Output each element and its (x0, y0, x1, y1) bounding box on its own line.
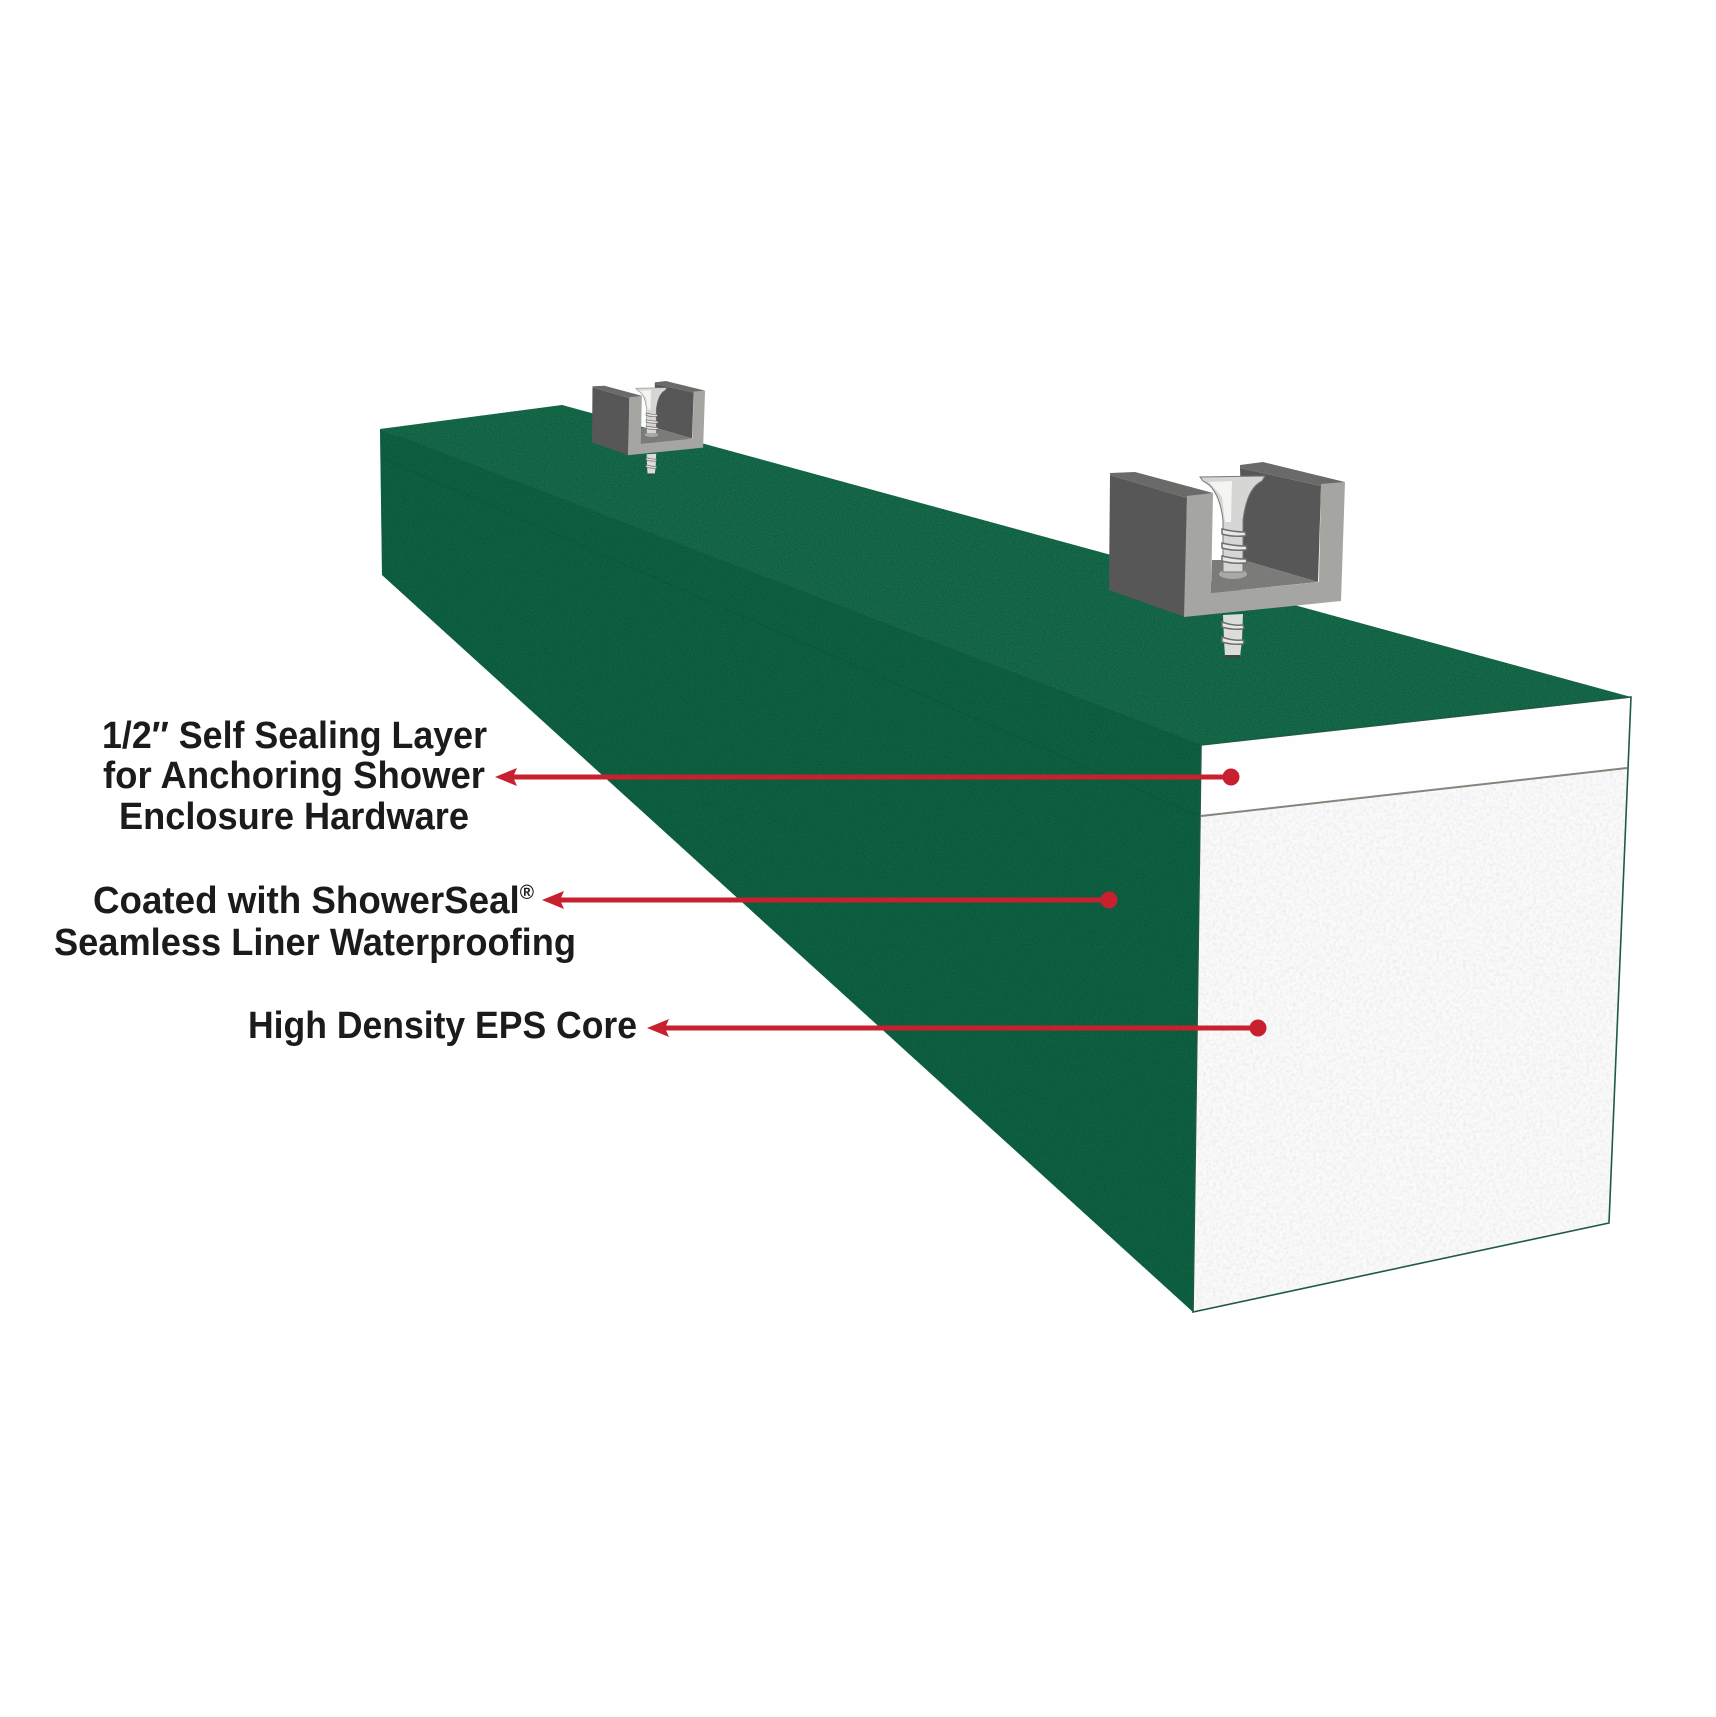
left face (380, 429, 1201, 1312)
label text (54, 880, 576, 964)
callout: EPS core (248, 1005, 1266, 1047)
label text: Coated with ShowerSeal (93, 880, 534, 922)
label text: High Density EPS Core (248, 1005, 637, 1047)
front face: EPS core (1193, 768, 1627, 1312)
front face outline (1193, 697, 1631, 1312)
label text: ® (520, 882, 534, 904)
top face (380, 405, 1631, 745)
label text: Enclosure Hardware (119, 796, 469, 838)
large bracket with screw (1109, 462, 1345, 658)
arrow (647, 1019, 1266, 1037)
front face: self sealing layer (1201, 697, 1631, 816)
callout: self sealing layer (102, 715, 1240, 838)
self sealing layer seam on left face (382, 436, 1201, 816)
small bracket with screw (592, 381, 705, 475)
arrow (542, 891, 1118, 909)
callout: ShowerSeal coating (54, 880, 1118, 964)
label text: Seamless Liner Waterproofing (54, 922, 576, 964)
label text: 1/2″ Self Sealing Layer (102, 715, 487, 757)
label text (102, 715, 487, 838)
arrow (495, 768, 1240, 786)
seam line between layers (1201, 768, 1627, 816)
curb body (380, 405, 1631, 1312)
label text: for Anchoring Shower (103, 755, 485, 797)
